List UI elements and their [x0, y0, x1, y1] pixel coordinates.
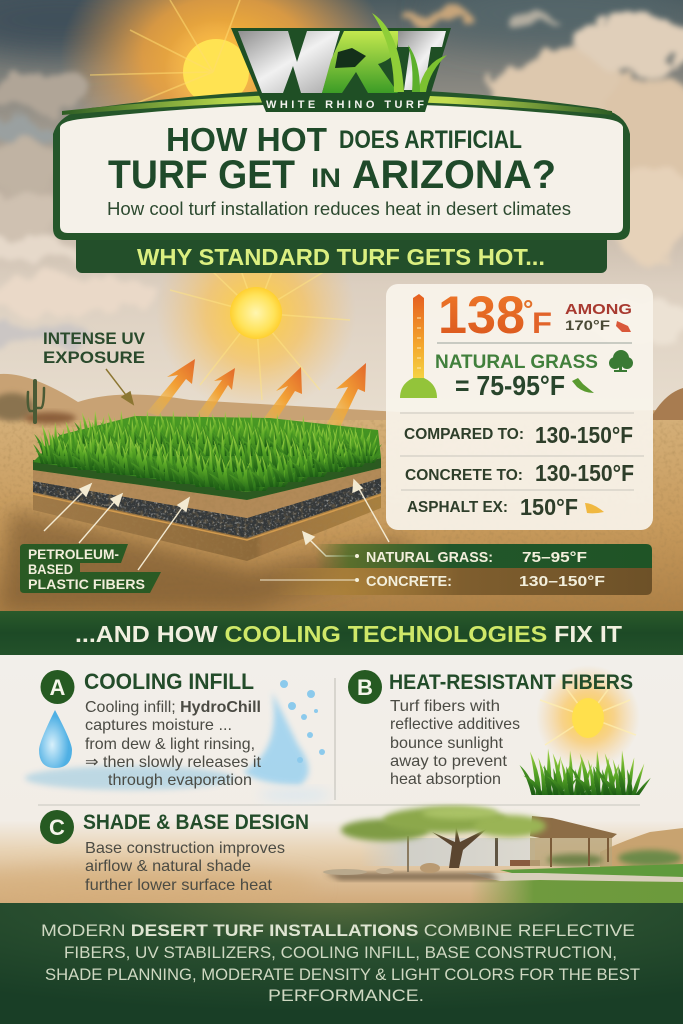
body text B: heat absorption	[390, 771, 501, 788]
body text B: away to prevent	[390, 753, 508, 770]
roof	[530, 816, 617, 838]
label: petroleum-based plastic fibers: PETROLEUM-	[28, 547, 119, 562]
comparison strip: 130–150°F	[519, 573, 605, 590]
among 170F note: 170°F	[565, 317, 611, 333]
body text C	[85, 840, 285, 894]
label: petroleum-based plastic fibers	[20, 544, 161, 593]
icon: grass leaf	[572, 378, 594, 393]
comparison rows: 150°F	[520, 494, 578, 520]
among 170F note	[565, 301, 632, 333]
icon: water splash	[243, 680, 331, 801]
comparison rows: CONCRETE TO:	[405, 467, 523, 484]
panel: temperature stats	[386, 284, 653, 530]
body text A: ⇒ then slowly releases it	[85, 754, 262, 771]
sky background	[0, 0, 683, 420]
title text: HOW HOT	[166, 121, 327, 158]
subtitle: How cool turf installation reduces heat in desert climates	[107, 199, 571, 219]
natural grass reading: = 75-95°F	[455, 370, 565, 401]
title text: DOES ARTIFICIAL	[339, 126, 522, 154]
title text	[108, 121, 556, 197]
icon: tree	[609, 350, 633, 372]
comparison strip: 75–95°F	[522, 549, 587, 566]
desert ground and hills	[0, 374, 683, 612]
footer summary: MODERN DESERT TURF INSTALLATIONS COMBINE REFLECTIVE	[41, 921, 635, 940]
driveway	[465, 873, 683, 882]
heading A: COOLING INFILL	[84, 669, 254, 694]
label: intense UV exposure: INTENSE UV	[43, 329, 146, 348]
comparison rows: 130-150°F	[535, 422, 633, 448]
icon: heat flame	[585, 503, 604, 513]
heading C: SHADE & BASE DESIGN	[83, 811, 309, 834]
footer summary: SHADE PLANNING, MODERATE DENSITY & LIGHT COLORS FOR THE BEST	[45, 965, 640, 984]
distant hills and bushes	[600, 828, 683, 868]
footer summary: PERFORMANCE.	[268, 986, 424, 1005]
badge C	[40, 810, 74, 844]
icon: grass tuft	[520, 748, 651, 795]
surface temperature: F	[532, 307, 552, 340]
icon: cactus	[28, 381, 44, 422]
tree	[341, 807, 546, 872]
turf cross-section diagram	[33, 410, 382, 563]
heading band: how cooling technologies fix it	[0, 611, 683, 655]
icon: thermometer	[400, 294, 437, 398]
pointer arrows to layers	[44, 480, 389, 570]
footer summary: FIBERS, UV STABILIZERS, COOLING INFILL, BASE CONSTRUCTION,	[64, 943, 617, 962]
label: petroleum-based plastic fibers: BASED	[28, 562, 73, 577]
natural grass reading	[435, 352, 598, 401]
footer summary	[0, 903, 683, 1024]
green edge band	[33, 458, 381, 500]
surface temperature: °	[523, 294, 533, 324]
lower lawn	[470, 880, 683, 905]
porch interior	[530, 838, 612, 866]
house wall	[360, 838, 535, 866]
arrow: UV pointing at turf	[106, 369, 133, 404]
badge A: A	[50, 675, 66, 700]
title text: IN	[311, 163, 341, 193]
body text B	[390, 698, 520, 788]
upper lawn	[500, 864, 683, 877]
body text A	[85, 699, 262, 789]
body text C: airflow & natural shade	[85, 858, 251, 875]
title text: TURF GET	[108, 153, 295, 197]
section B: heat-resistant fibers	[348, 665, 651, 795]
grass mass	[33, 410, 382, 492]
gravel layer	[33, 476, 381, 538]
background sun with rays	[156, 213, 356, 413]
label: intense UV exposure	[43, 329, 146, 367]
comparison strip	[260, 544, 652, 595]
title text: ARIZONA?	[352, 153, 556, 197]
body text A: from dew & light rinsing,	[85, 736, 255, 753]
heading B: HEAT-RESISTANT FIBERS	[389, 671, 633, 694]
body text A: through evaporation	[108, 772, 252, 789]
body text B: bounce sunlight	[390, 735, 504, 752]
bottom soil layer	[33, 492, 381, 561]
badge A	[40, 670, 74, 704]
badge B: B	[357, 675, 373, 700]
body text B: reflective additives	[390, 716, 520, 733]
badge B	[348, 670, 382, 704]
body text A: Cooling infill; HydroChill	[85, 699, 261, 716]
body text C: further lower surface heat	[85, 877, 273, 894]
comparison rows: COMPARED TO:	[404, 426, 524, 443]
sand layer	[33, 468, 381, 518]
body text C: Base construction improves	[85, 840, 285, 857]
surface temperature: 138	[438, 286, 525, 345]
natural grass reading: NATURAL GRASS	[435, 352, 598, 373]
among 170F note: AMONG	[565, 301, 632, 318]
section A: cooling infill	[25, 669, 331, 801]
icon: sun	[536, 665, 640, 769]
comparison rows	[404, 422, 634, 520]
panel: cooling technologies	[0, 611, 683, 1024]
soil strip and rocks	[325, 873, 500, 880]
heading: why standard turf gets hot	[76, 232, 607, 273]
comparison strip: CONCRETE:	[366, 573, 452, 590]
logo: White Rhino Turf	[231, 13, 451, 112]
comparison rows: ASPHALT EX:	[407, 499, 508, 516]
label: petroleum-based plastic fibers: PLASTIC FIBERS	[28, 577, 145, 592]
heat arrows rising	[147, 359, 366, 436]
section C: shade and base design	[40, 807, 683, 905]
logo: White Rhino Turf: WHITE RHINO TURF	[266, 99, 424, 111]
icon: water puddle	[25, 766, 235, 790]
scene: house, tree and lawn	[323, 807, 683, 905]
title panel	[53, 88, 630, 240]
comparison rows: 130-150°F	[535, 460, 634, 486]
body text B: Turf fibers with	[390, 698, 500, 715]
label: intense UV exposure: EXPOSURE	[43, 348, 145, 367]
comparison strip: NATURAL GRASS:	[366, 549, 493, 566]
heading band: how cooling technologies fix it: ...AND HOW COOLING TECHNOLOGIES FIX IT	[75, 621, 622, 647]
heading: why standard turf gets hot: WHY STANDARD TURF GETS HOT...	[137, 244, 545, 270]
badge C: C	[49, 815, 65, 840]
icon: water drop	[39, 710, 72, 768]
body text A: captures moisture ...	[85, 717, 232, 734]
